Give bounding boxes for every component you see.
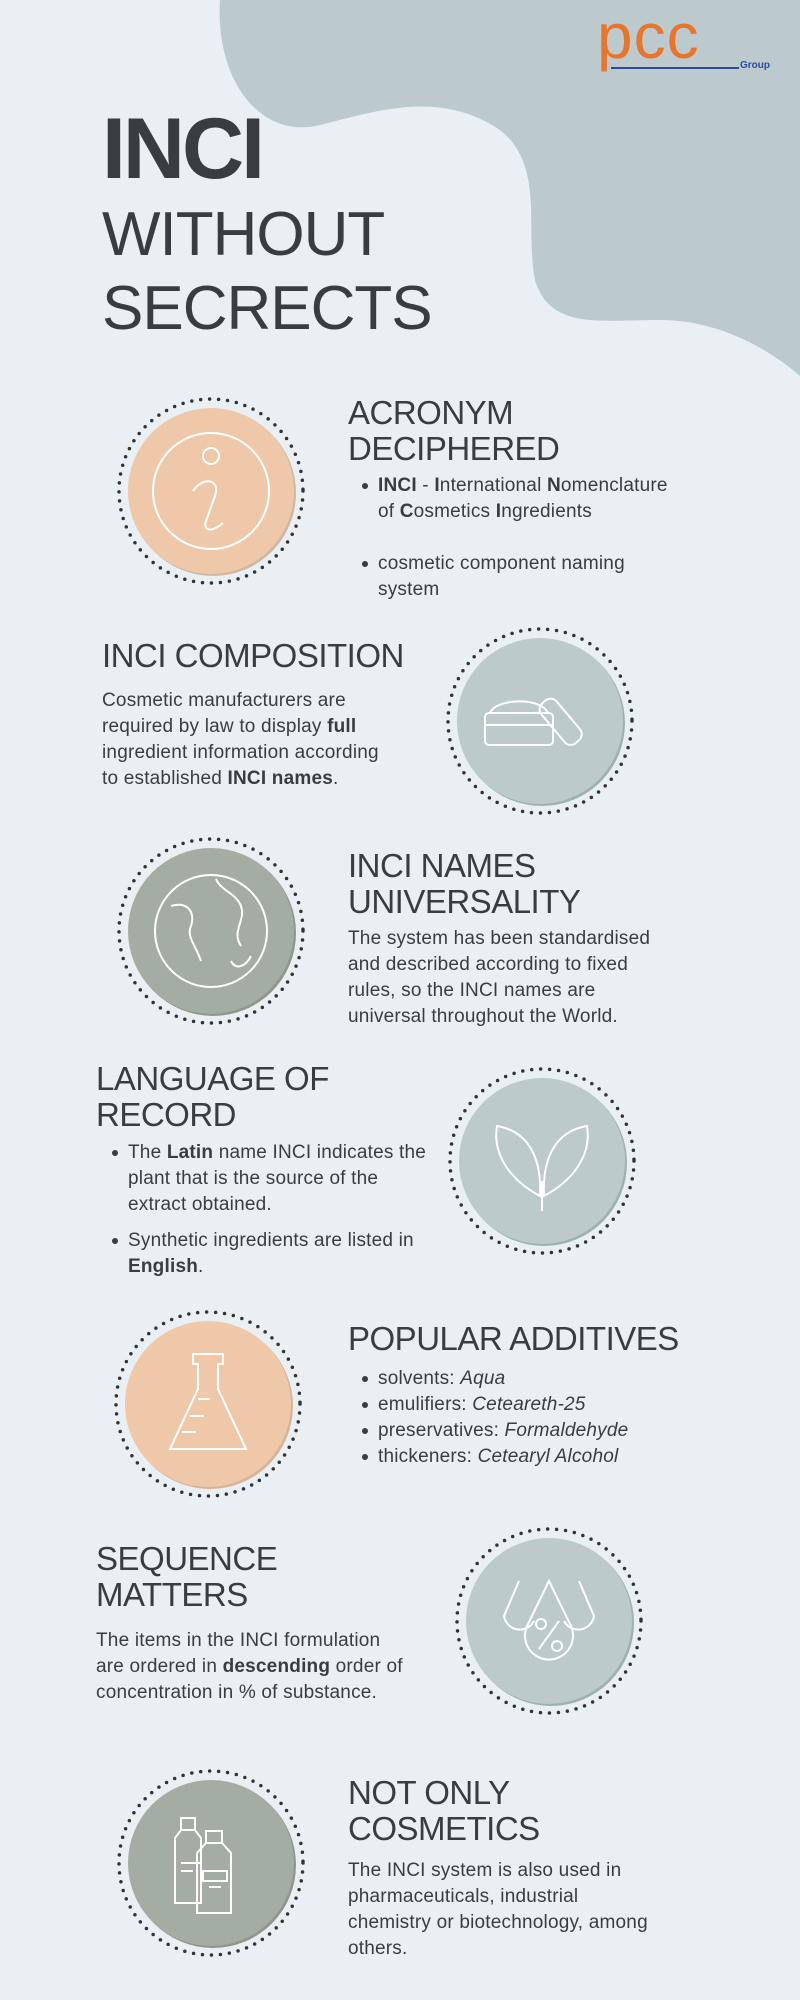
text: not only cosmetics: chemistry or biotechnology, among <box>348 1912 648 1933</box>
text: additives list: solvents: Aqua <box>378 1368 505 1389</box>
heading: inci composition: INCI COMPOSITION <box>102 637 404 674</box>
heading: language of record: RECORD <box>96 1096 236 1133</box>
text: acronym bullets: of Cosmetics Ingredients <box>378 501 592 522</box>
text: additives list <box>362 1368 628 1467</box>
heading: acronym deciphered <box>348 394 559 467</box>
text: acronym bullets <box>362 475 668 600</box>
text: sequence <box>96 1630 403 1703</box>
text: sequence: are ordered in descending order of <box>96 1656 403 1677</box>
text: universality: rules, so the INCI names are <box>348 980 595 1001</box>
text: language bullets: The Latin name INCI indicates the <box>128 1142 426 1163</box>
text: not only cosmetics: pharmaceuticals, industrial <box>348 1886 578 1907</box>
text: sequence: The items in the INCI formulation <box>96 1630 380 1651</box>
title: SECRECTS <box>102 274 432 343</box>
text: acronym bullets: system <box>378 579 439 600</box>
logo: PCC Group: Group <box>740 60 770 71</box>
text: universality: universal throughout the World. <box>348 1006 618 1027</box>
icon: flask <box>114 1310 302 1498</box>
heading: universality: UNIVERSALITY <box>348 883 580 920</box>
text: acronym bullets: cosmetic component naming <box>378 553 625 574</box>
text: sequence: concentration in % of substance. <box>96 1682 377 1703</box>
background blob <box>220 0 800 376</box>
text: universality: The system has been standardised <box>348 928 650 949</box>
icon: globe <box>117 837 305 1025</box>
text: additives list: thickeners: Cetearyl Alcohol <box>378 1446 618 1467</box>
text: language bullets: plant that is the source of the <box>128 1168 378 1189</box>
text: additives list: emulifiers: Ceteareth-25 <box>378 1394 586 1415</box>
title: INCI <box>102 101 262 197</box>
text: not only cosmetics: The INCI system is also used in <box>348 1860 621 1881</box>
heading: popular additives: POPULAR ADDITIVES <box>348 1320 679 1357</box>
text: additives list: preservatives: Formaldehyde <box>378 1420 628 1441</box>
text: composition: Cosmetic manufacturers are <box>102 690 346 711</box>
heading: universality <box>348 847 580 920</box>
heading: acronym deciphered: DECIPHERED <box>348 430 559 467</box>
icon: leaves <box>448 1067 636 1255</box>
heading: language of record: LANGUAGE OF <box>96 1060 329 1097</box>
icon: bottles <box>117 1769 305 1957</box>
text: composition: required by law to display full <box>102 716 356 737</box>
icon: cream jar <box>446 627 634 815</box>
text: acronym bullets: INCI - International Nomenclature <box>378 475 668 496</box>
text: composition: to established INCI names. <box>102 768 338 789</box>
text: not only cosmetics: others. <box>348 1938 408 1959</box>
text: language bullets: extract obtained. <box>128 1194 272 1215</box>
heading: not only cosmetics <box>348 1774 540 1847</box>
text: universality <box>348 928 650 1027</box>
logo: PCC Group <box>597 0 770 72</box>
text: language bullets: English. <box>128 1256 204 1277</box>
heading: universality: INCI NAMES <box>348 847 536 884</box>
title <box>102 101 432 343</box>
text: composition <box>102 690 379 789</box>
icon: info circle <box>117 397 305 585</box>
heading: sequence matters: MATTERS <box>96 1576 248 1613</box>
text: universality: and described according to fixed <box>348 954 628 975</box>
heading: sequence matters <box>96 1540 277 1613</box>
heading: sequence matters: SEQUENCE <box>96 1540 277 1577</box>
logo: PCC Group: pcc <box>597 0 700 72</box>
title: WITHOUT <box>102 200 384 269</box>
heading: not only cosmetics: NOT ONLY <box>348 1774 510 1811</box>
heading: not only cosmetics: COSMETICS <box>348 1810 540 1847</box>
text: composition: ingredient information according <box>102 742 379 763</box>
text: not only cosmetics <box>348 1860 648 1959</box>
heading: language of record <box>96 1060 329 1133</box>
heading: acronym deciphered: ACRONYM <box>348 394 513 431</box>
text: language bullets: Synthetic ingredients are listed in <box>128 1230 414 1251</box>
icon: drops percent <box>455 1527 643 1715</box>
text: language bullets <box>112 1142 426 1277</box>
